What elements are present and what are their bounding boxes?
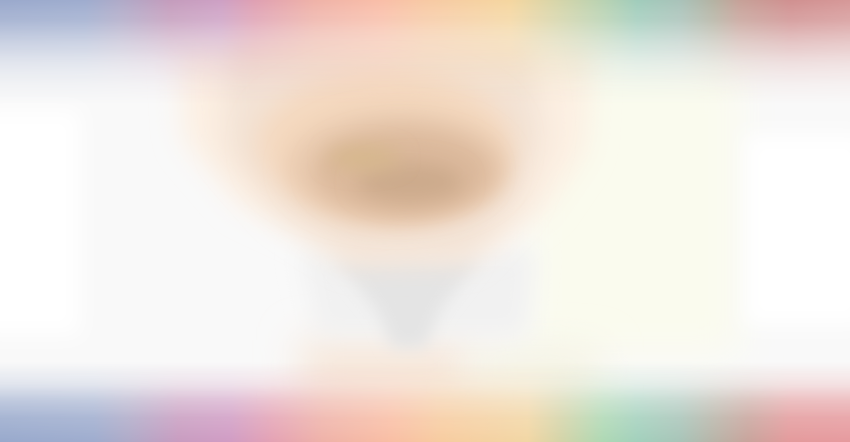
bowl outer glow	[178, 45, 592, 254]
bottom colour band	[0, 370, 850, 442]
bowl core	[313, 128, 493, 216]
bowl dark centre	[356, 162, 464, 202]
bowl amber ring	[257, 73, 513, 217]
bowl warm interior	[286, 110, 510, 226]
bowl ochre highlight	[328, 148, 400, 168]
top colour band	[0, 0, 850, 85]
vessel: bowl	[176, 40, 588, 266]
vessel: stem	[320, 262, 516, 350]
bowl inner rim	[224, 45, 545, 264]
